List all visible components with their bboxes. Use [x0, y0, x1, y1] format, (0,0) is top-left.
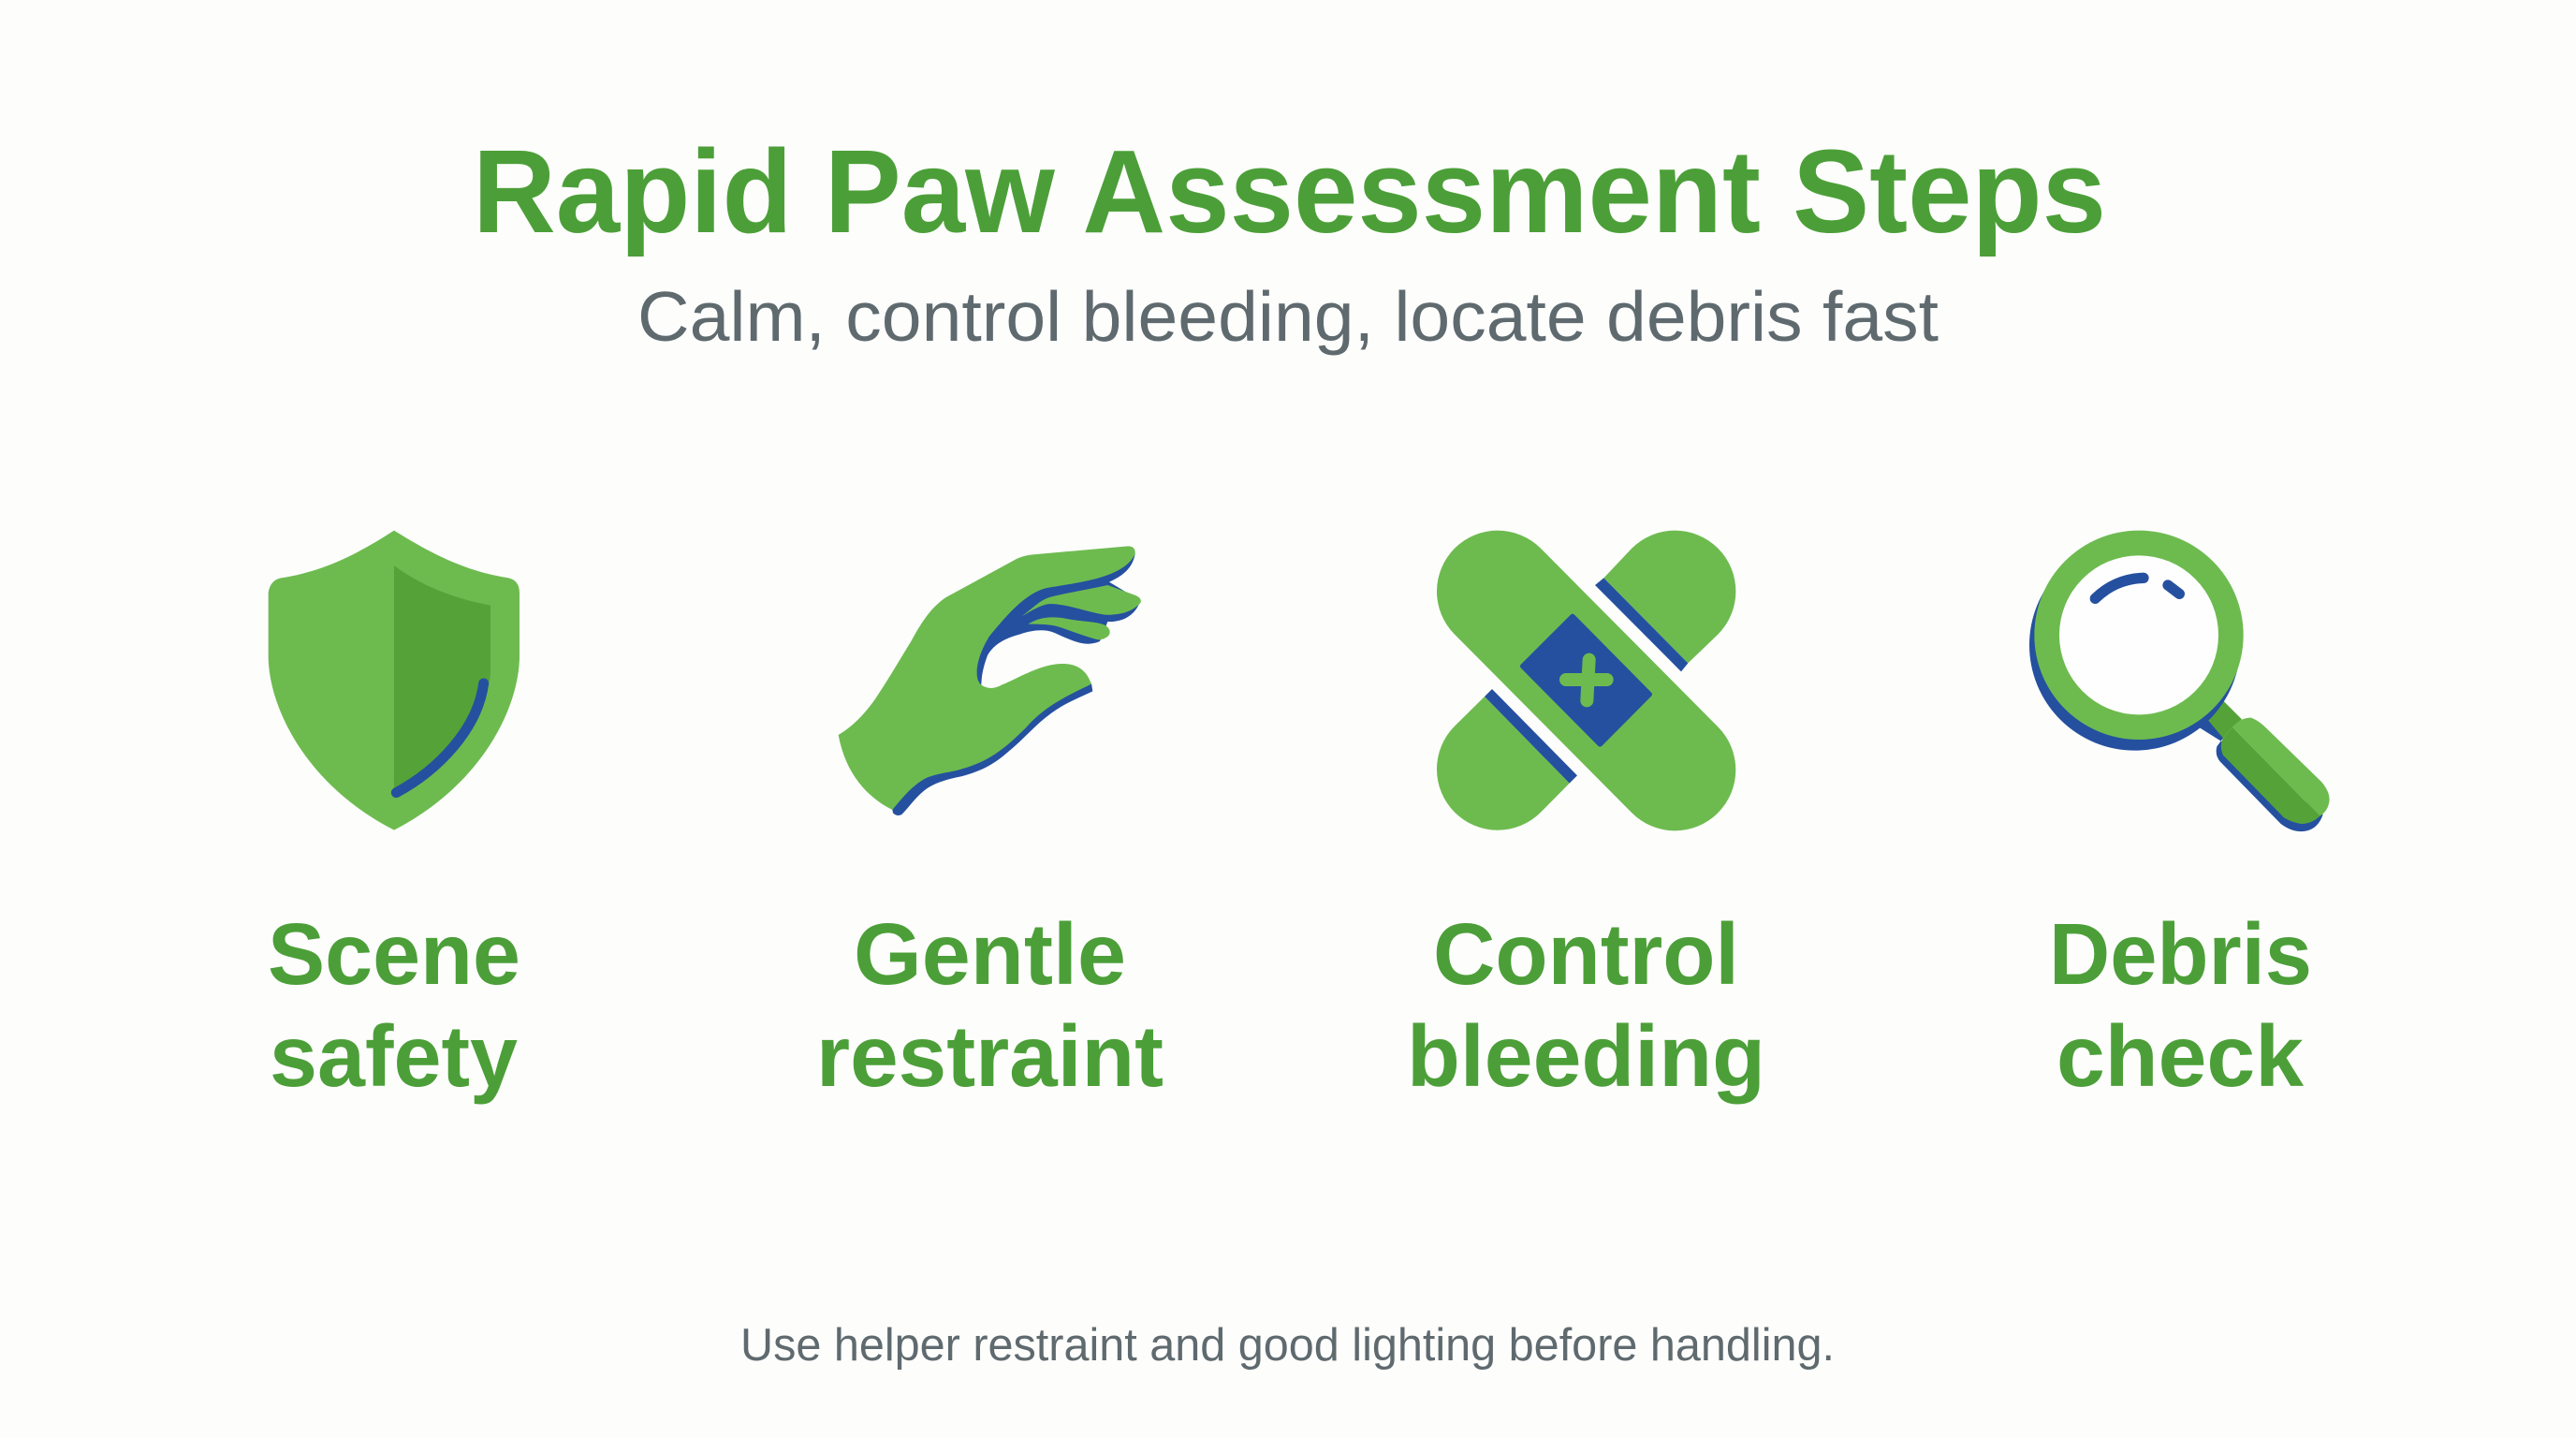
label: gentle restraint: restraint — [816, 1007, 1164, 1105]
label: debris check: Debris — [2049, 905, 2312, 1003]
label: scene safety: safety — [270, 1007, 518, 1105]
icon: shield — [269, 531, 520, 830]
label: scene safety — [268, 905, 520, 1105]
icon: hand — [839, 546, 1141, 815]
label: scene safety: Scene — [268, 905, 520, 1003]
label: control bleeding: bleeding — [1407, 1007, 1765, 1105]
title: Rapid Paw Assessment Steps — [473, 125, 2106, 257]
label: gentle restraint — [816, 905, 1164, 1105]
label: debris check: check — [2056, 1007, 2304, 1105]
icon: magnifying glass — [2029, 531, 2330, 831]
subtitle: Calm, control bleeding, locate debris fast — [637, 277, 1939, 356]
icon: crossed bandages — [1437, 531, 1735, 830]
label: debris check — [2049, 905, 2312, 1105]
label: control bleeding — [1407, 905, 1765, 1105]
label: gentle restraint: Gentle — [854, 905, 1126, 1003]
footer note: Use helper restraint and good lighting before handling. — [740, 1320, 1835, 1371]
label: control bleeding: Control — [1433, 905, 1739, 1003]
